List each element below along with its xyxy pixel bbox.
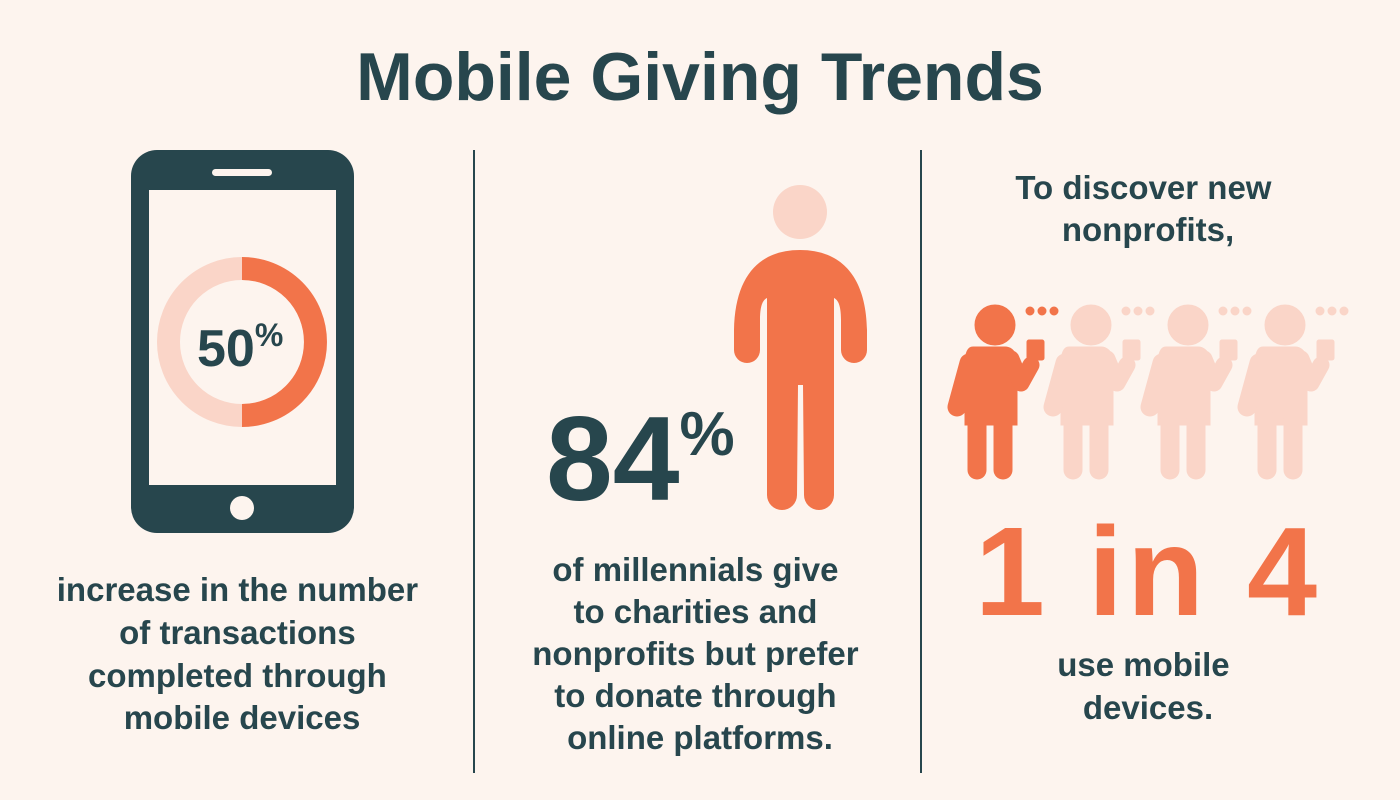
icon: phone with donut chart: % [255, 317, 283, 353]
title: Mobile Giving Trends [356, 39, 1044, 115]
text: middle description: to donate through [554, 677, 837, 714]
text: right heading: nonprofits, [1062, 211, 1234, 248]
text: middle description: online platforms. [567, 719, 833, 756]
text: middle description: to charities and [573, 593, 817, 630]
text: left description: increase in the number [57, 571, 418, 608]
text: right description: devices. [1083, 689, 1213, 726]
text: left description: of transactions [119, 614, 356, 651]
stat: 84%: % [679, 400, 735, 469]
text: right heading: To discover new [1015, 169, 1272, 206]
icon: phone with donut chart [131, 150, 354, 533]
icon: four people, one highlighted [957, 305, 1348, 470]
stat: 84%: 84 [546, 392, 679, 526]
text: left description: mobile devices [124, 699, 360, 736]
stat: 1 in 4: 1 in 4 [975, 501, 1321, 642]
icon: phone with donut chart: 50 [197, 320, 255, 378]
text: left description: completed through [88, 657, 387, 694]
text: right description: use mobile [1057, 646, 1230, 683]
text: middle description: of millennials give [552, 551, 838, 588]
text: middle description: nonprofits but prefer [532, 635, 859, 672]
icon: standing person [734, 185, 867, 510]
